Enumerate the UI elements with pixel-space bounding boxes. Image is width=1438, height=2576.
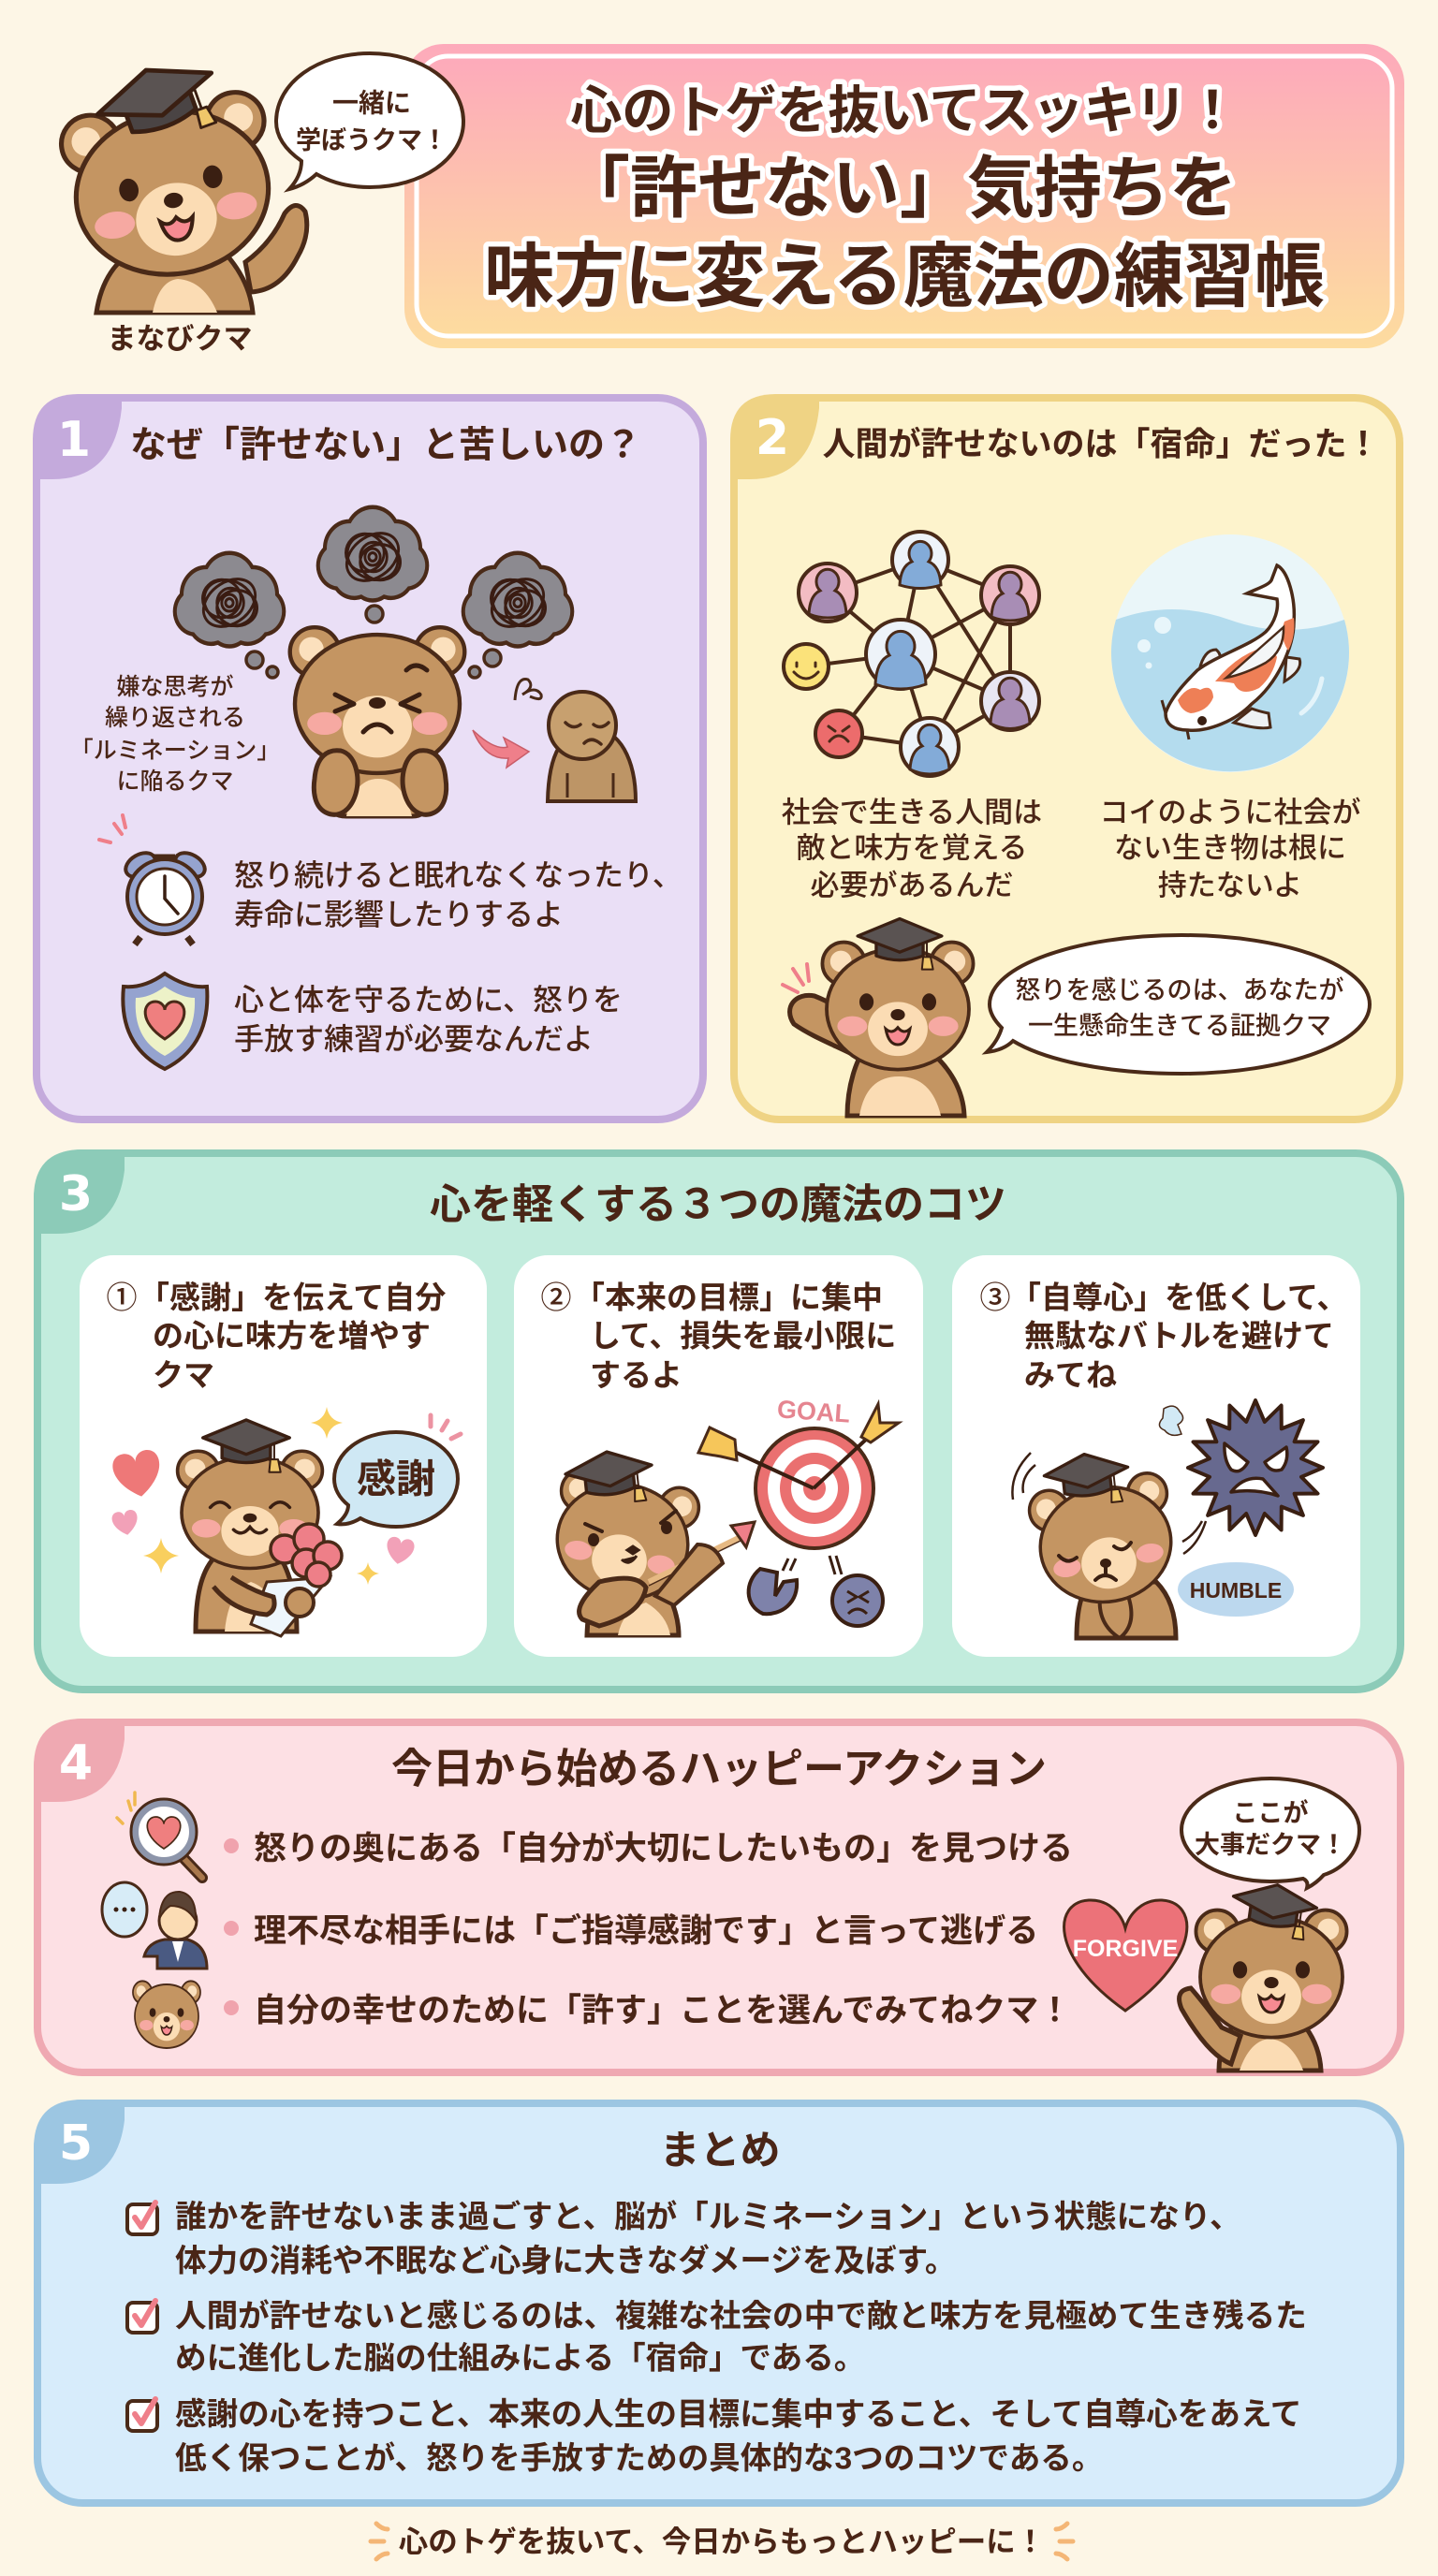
fist-pump bear <box>783 919 974 1116</box>
icon: alarm clock <box>99 815 209 944</box>
icon: magnifier with heart <box>117 1793 202 1878</box>
label: rumination: 嫌な思考が <box>116 674 234 700</box>
text: health effects <box>234 858 682 931</box>
card 3 text: ③ <box>979 1281 1011 1314</box>
text: health effects: 寿命に影響したりするよ <box>234 898 564 931</box>
humble label: HUMBLE <box>1190 1578 1282 1603</box>
card 2 text <box>541 1281 896 1393</box>
caption: koi: コイのように社会が <box>1099 796 1361 829</box>
checklist item 3: 低く保つことが、怒りを手放すための具体的な3つのコツである。 <box>175 2439 1103 2477</box>
icon: shield with heart <box>123 973 207 1069</box>
action items: 理不尽な相手には「ご指導感謝です」と言って逃げる <box>254 1913 1038 1949</box>
heading 2: 人間が許せないのは「宿命」だった！ <box>822 427 1380 462</box>
card 2 text: して、損失を最小限に <box>590 1318 896 1354</box>
card 2 text: ② <box>541 1281 571 1314</box>
speech bubble: let's learn: 一緒に <box>332 88 411 118</box>
arrow to tired person <box>473 730 529 768</box>
gratitude bear with bouquet <box>178 1420 342 1636</box>
card 1 text: 「感謝」を伝えて自分 <box>139 1281 446 1314</box>
text: health effects: 怒り続けると眠れなくなったり、 <box>234 858 682 892</box>
checklist item 3: 感謝の心を持つこと、本来の人生の目標に集中すること、そして自尊心をあえて <box>175 2396 1301 2432</box>
panel 4: happy actions <box>34 1719 1401 2072</box>
label: rumination: に陥るクマ <box>116 768 234 795</box>
speech bubble: this is important: ここが <box>1232 1798 1309 1827</box>
badge 3 <box>34 1149 125 1234</box>
caption: koi <box>1099 796 1361 902</box>
title banner <box>404 44 1404 348</box>
target with arrows: GOAL <box>776 1395 851 1428</box>
card 2 text: するよ <box>590 1357 682 1393</box>
title line 3: 味方に変える魔法の練習帳 <box>484 237 1325 315</box>
checklist item 1: 体力の消耗や不眠など心身に大きなダメージを及ぼす。 <box>175 2243 956 2278</box>
humble label <box>1178 1562 1294 1617</box>
card 3 text: 無駄なバトルを避けて <box>1024 1318 1334 1354</box>
checklist item 2: 人間が許せないと感じるのは、複雑な社会の中で敵と味方を見極めて生き残るた <box>175 2297 1307 2334</box>
badge 1 <box>33 394 122 479</box>
mascot bear with graduation cap <box>57 50 307 313</box>
label: rumination <box>70 674 280 795</box>
text: let go of anger <box>234 983 623 1056</box>
card 2 text: 「本来の目標」に集中 <box>574 1281 883 1314</box>
text: let go of anger: 手放す練習が必要なんだよ <box>234 1022 594 1056</box>
cheering bear <box>1180 1879 1347 2071</box>
card 1 text: ① <box>107 1281 137 1314</box>
defeated negatives <box>749 1556 883 1626</box>
card 1 text <box>107 1281 446 1393</box>
caption: enemies and allies: 必要があるんだ <box>811 869 1013 902</box>
koi in water circle <box>1111 534 1349 772</box>
bowing bear <box>1026 1450 1184 1638</box>
caption: enemies and allies <box>782 796 1042 902</box>
checklist item 2 <box>127 2297 1307 2376</box>
forgive heart: FORGIVE <box>1073 1936 1178 1962</box>
badge 3: 3 <box>59 1166 93 1222</box>
speech bubble: proof of living <box>987 935 1370 1074</box>
caption: enemies and allies: 社会で生きる人間は <box>782 796 1042 829</box>
card 3 text: みてね <box>1024 1357 1117 1393</box>
speech bubble: let's learn: 学ぼうクマ！ <box>296 126 448 154</box>
action items: 怒りの奥にある「自分が大切にしたいもの」を見つける <box>254 1831 1073 1866</box>
panel 2: human destiny <box>730 394 1400 1120</box>
caption: koi: 持たないよ <box>1158 869 1302 902</box>
speech bubble: this is important <box>1181 1778 1359 1888</box>
panel 5: summary <box>34 2100 1401 2503</box>
checklist item 1: 誰かを許せないまま過ごすと、脳が「ルミネーション」という状態になり、 <box>175 2198 1241 2235</box>
badge 2 <box>730 394 819 479</box>
badge 5 <box>34 2100 125 2184</box>
card 1 text: クマ <box>153 1357 214 1393</box>
speech bubble: let's learn <box>276 53 463 189</box>
spiky angry monster <box>1188 1400 1323 1535</box>
heading 3: 心を軽くする３つの魔法のコツ <box>430 1181 1006 1228</box>
title line 2: 「許せない」気持ちを <box>563 152 1237 227</box>
speech bubble: proof of living: 一生懸命生きてる証拠クマ <box>1028 1012 1331 1040</box>
panel 1: why it hurts <box>33 394 703 1120</box>
badge 5: 5 <box>59 2115 93 2172</box>
card 1: gratitude <box>80 1255 487 1657</box>
speech bubble: thanks: 感謝 <box>357 1456 435 1501</box>
heading 5: まとめ <box>659 2129 781 2174</box>
title line 1: 心のトゲを抜いてスッキリ！ <box>570 81 1239 139</box>
determined bear <box>544 1447 755 1635</box>
heading 4: 今日から始めるハッピーアクション <box>391 1747 1047 1792</box>
card 1 text: の心に味方を増やす <box>153 1318 431 1354</box>
tired person <box>515 679 636 801</box>
caption: enemies and allies: 敵と味方を覚える <box>796 831 1028 865</box>
target with arrows <box>698 1395 899 1548</box>
card 3 text <box>979 1281 1347 1393</box>
motion lines <box>1012 1453 1206 1554</box>
label: rumination: 繰り返される <box>105 705 245 731</box>
thought clouds <box>175 507 572 678</box>
caption: koi: ない生き物は根に <box>1114 831 1346 865</box>
icon: bear face <box>133 1981 200 2048</box>
action items: 自分の幸せのために「許す」ことを選んでみてねクマ！ <box>254 1992 1071 2029</box>
card 2: goal <box>514 1255 923 1657</box>
speech bubble: thanks <box>334 1432 458 1527</box>
label: rumination: 「ルミネーション」 <box>70 738 280 764</box>
badge 4 <box>34 1719 125 1802</box>
badge 4: 4 <box>59 1735 93 1792</box>
forgive heart <box>1064 1900 1187 2011</box>
checklist item 3 <box>127 2396 1301 2477</box>
worried bear <box>290 627 464 816</box>
speech bubble: proof of living: 怒りを感じるのは、あなたが <box>1015 976 1344 1004</box>
badge 2: 2 <box>756 410 789 466</box>
text: let go of anger: 心と体を守るために、怒りを <box>234 983 623 1017</box>
closing message: 心のトゲを抜いて、今日からもっとハッピーに！ <box>399 2525 1045 2558</box>
speech bubble: this is important: 大事だクマ！ <box>1195 1831 1346 1859</box>
mascot name: まなびクマ <box>107 322 253 356</box>
badge 1: 1 <box>57 412 91 468</box>
heading 1: なぜ「許せない」と苦しいの？ <box>130 425 641 466</box>
icon: polite man in suit <box>102 1882 207 1969</box>
panel 3: three magic tips <box>34 1149 1401 1690</box>
action items <box>224 1831 1073 2029</box>
hearts and sparkles <box>110 1407 461 1585</box>
checklist item 2: めに進化した脳の仕組みによる「宿命」である。 <box>175 2340 865 2376</box>
card 3 text: 「自尊心」を低くして、 <box>1010 1281 1347 1314</box>
steam puff <box>1159 1406 1183 1435</box>
checklist item 1 <box>127 2198 1241 2278</box>
network diagram <box>784 532 1039 776</box>
card 3: humility <box>952 1255 1360 1657</box>
